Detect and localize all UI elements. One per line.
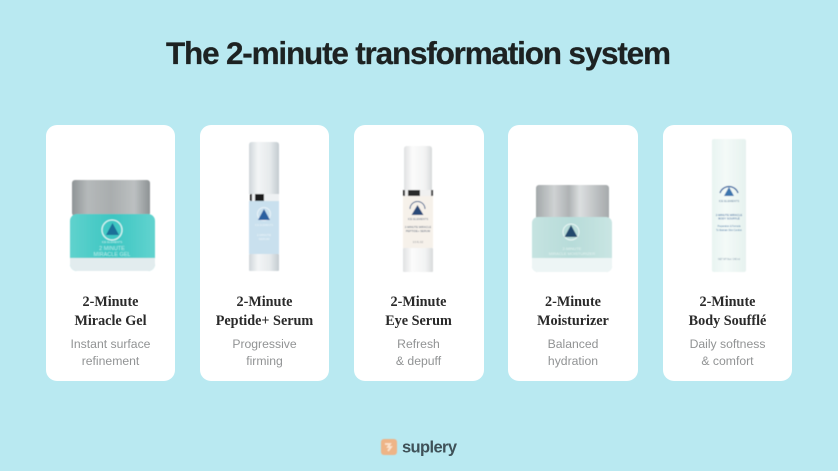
product name line 2: Miracle Gel xyxy=(74,313,147,329)
product name: 2-Minute xyxy=(391,294,446,310)
icon: Eye serum pump xyxy=(403,146,433,272)
title: The 2-minute transformation system xyxy=(166,35,671,71)
product name line 2: Body Soufflé xyxy=(689,313,766,329)
logo: suplery: suplery xyxy=(402,438,458,456)
icon: Body Soufflé bottle: To Maintain Skin Comfort xyxy=(716,229,742,232)
product name line 2: Moisturizer xyxy=(537,313,609,329)
product name: 2-Minute xyxy=(700,294,755,310)
panel: Peptide+ Serum xyxy=(200,125,329,381)
icon: Peptide serum pump: ICE ELEMENTS xyxy=(255,224,273,227)
icon: Moisturizer jar xyxy=(532,185,612,272)
icon: Moisturizer jar: MIRACLE MOISTURIZER xyxy=(549,251,595,256)
icon: Eye serum pump: 0.5 FL OZ xyxy=(413,242,424,244)
description: Instant surface xyxy=(71,337,151,351)
icon: Peptide serum pump: 2-MINUTE xyxy=(257,233,271,237)
icon: Miracle Gel jar: 2 MINUTE xyxy=(99,246,125,252)
icon: Peptide serum pump xyxy=(249,142,279,271)
icon: suplery mark xyxy=(381,439,397,455)
icon: Moisturizer jar: 2-MINUTE xyxy=(563,246,582,251)
product name line 2: Peptide+ Serum xyxy=(216,313,313,329)
description line 2: & depuff xyxy=(396,354,442,368)
description: Balanced xyxy=(548,337,598,351)
icon: Body Soufflé bottle: 2-MINUTE MIRACLE xyxy=(716,213,742,217)
icon: Body Soufflé bottle: Preparation & Formula xyxy=(717,225,741,228)
description line 2: & comfort xyxy=(701,354,754,368)
description line 2: refinement xyxy=(82,354,140,368)
icon: Body Soufflé bottle: ICE ELEMENTS xyxy=(719,199,739,203)
icon: Miracle Gel jar: MIRACLE GEL xyxy=(94,252,130,258)
description line 2: firming xyxy=(246,354,283,368)
icon: Body Soufflé bottle: BODY SOUFFLÉ xyxy=(718,216,740,220)
description line 2: hydration xyxy=(548,354,598,368)
product name: 2-Minute xyxy=(83,294,138,310)
icon: Body Soufflé bottle: NET WT 8oz / 240 ml xyxy=(718,259,740,261)
icon: Eye serum pump: 2-MINUTE MIRACLE xyxy=(405,225,431,229)
icon: Miracle Gel jar xyxy=(70,180,155,271)
icon: Body Soufflé bottle xyxy=(712,139,746,272)
description: Progressive xyxy=(232,337,297,351)
description: Refresh xyxy=(397,337,440,351)
product name line 2: Eye Serum xyxy=(385,313,452,329)
product name: 2-Minute xyxy=(545,294,601,310)
panel: Body Soufflé xyxy=(663,125,792,381)
panel: Miracle Gel xyxy=(46,125,175,381)
icon: Miracle Gel jar: ICE ELEMENTS xyxy=(102,240,122,244)
panel: Eye Serum xyxy=(354,125,484,381)
description: Daily softness xyxy=(690,337,765,351)
icon: Peptide serum pump: SERUM xyxy=(259,237,270,241)
icon: Eye serum pump: ICE ELEMENTS xyxy=(408,217,428,221)
icon: Eye serum pump: PEPTIDE+ SERUM xyxy=(406,229,431,233)
product name: 2-Minute xyxy=(237,294,292,310)
panel: Moisturizer xyxy=(508,125,638,381)
